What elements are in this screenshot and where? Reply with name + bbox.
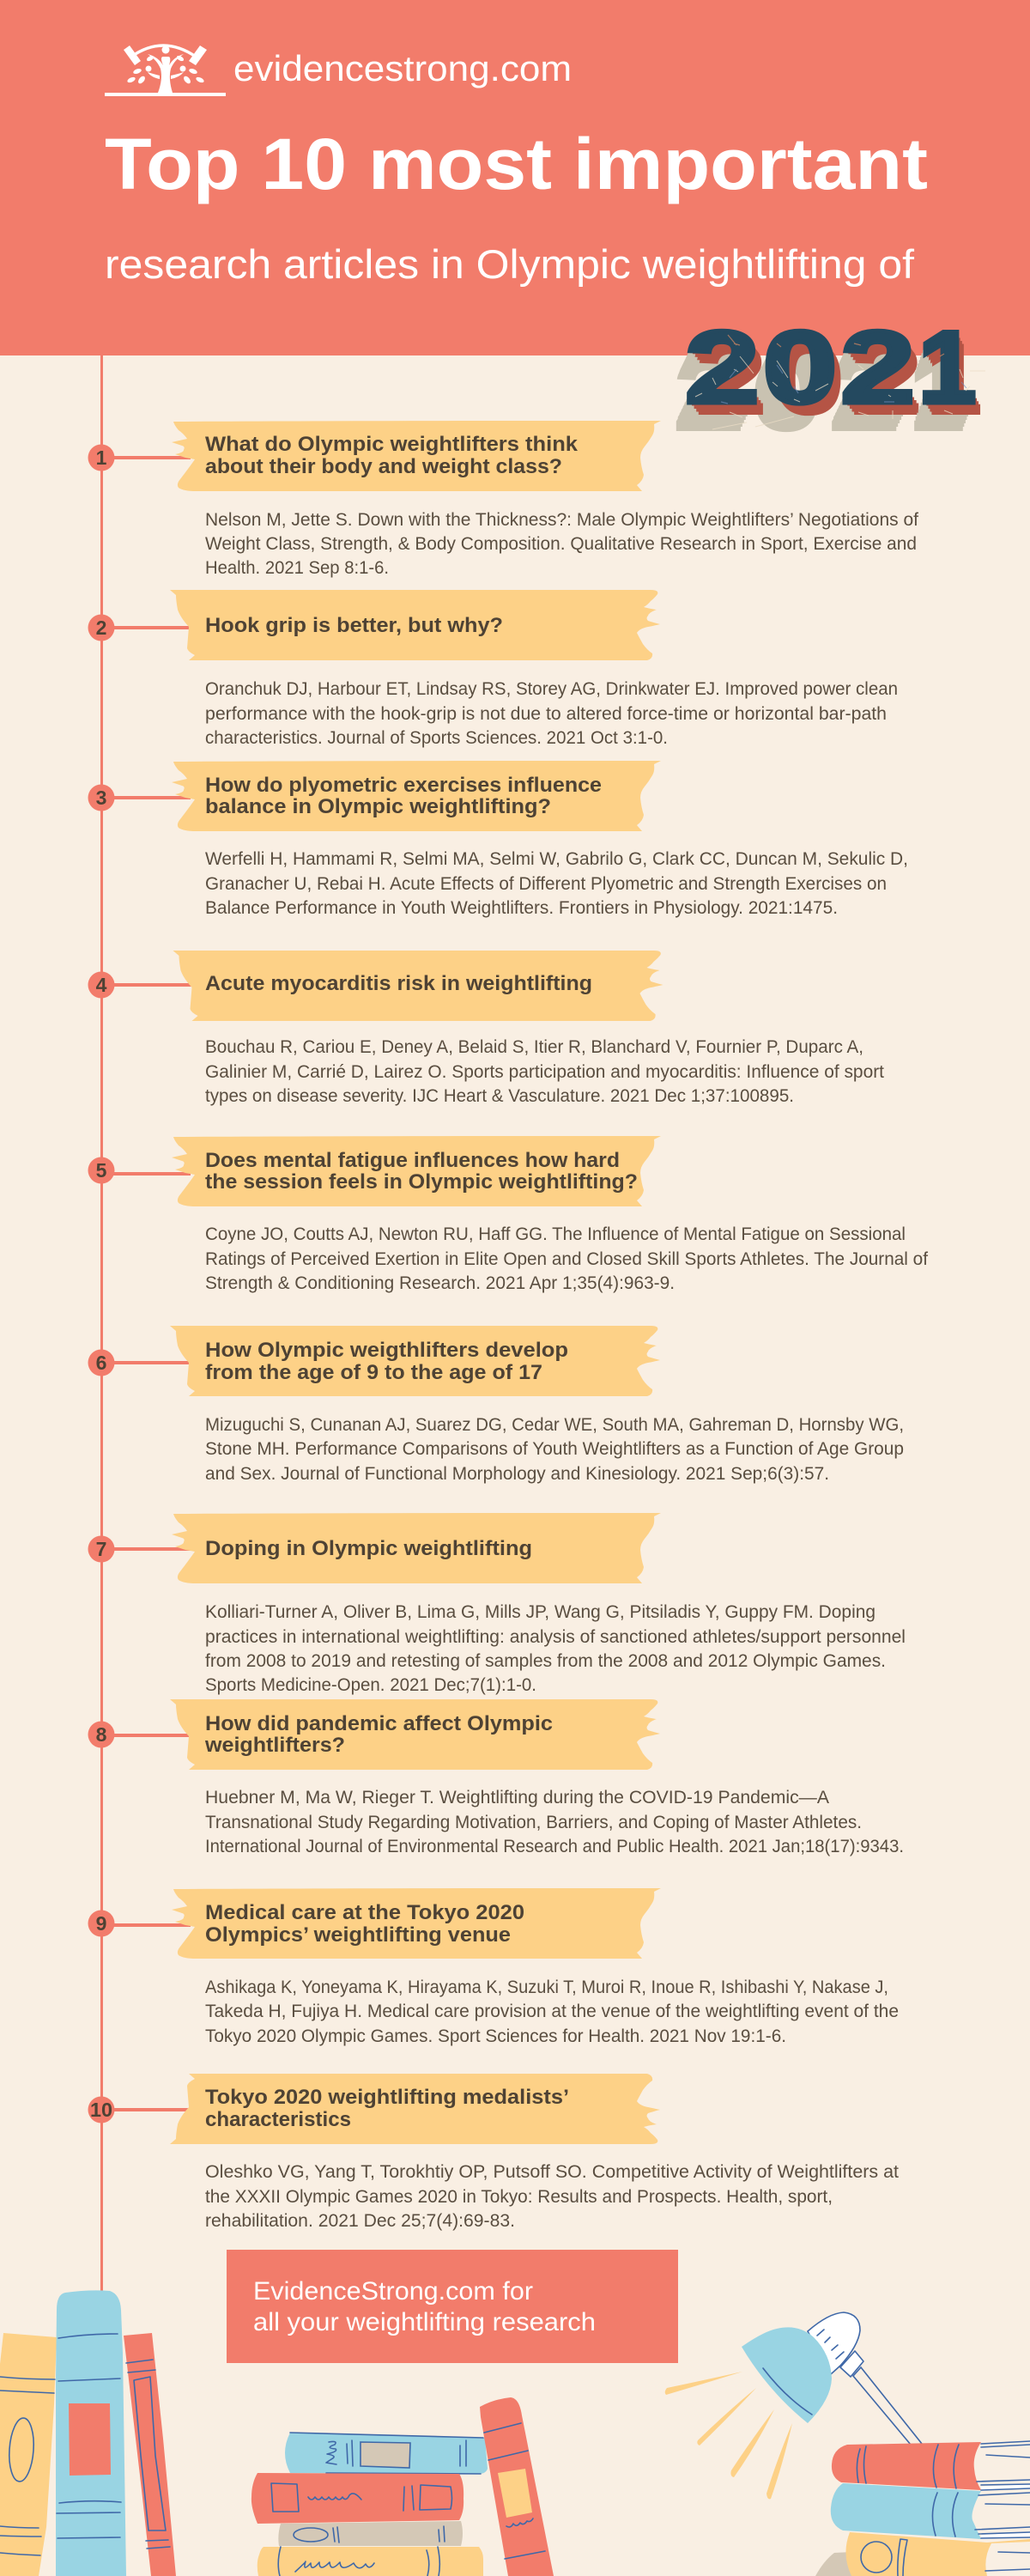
- heading 9: [205, 1901, 524, 1947]
- title: Top 10 most important: [105, 124, 928, 204]
- item 4: [88, 951, 884, 1106]
- icon: leaning book centre right: [480, 2397, 554, 2576]
- number badge 2: 2: [96, 617, 106, 639]
- number badge 1: 1: [96, 447, 107, 469]
- heading 5: the session feels in Olympic weightlifting?: [205, 1170, 638, 1194]
- number badge 2: [88, 615, 115, 641]
- connector 5: [112, 1172, 191, 1176]
- citation 10: Oleshko VG, Yang T, Torokhtiy OP, Putsoff SO. Competitive Activity of Weightlifters at: [205, 2162, 899, 2182]
- number badge 3: [88, 785, 115, 811]
- heading 8: [204, 1712, 553, 1757]
- citation 7: Kolliari-Turner A, Oliver B, Lima G, Mills JP, Wang G, Pitsiladis Y, Guppy FM. Doping: [205, 1602, 876, 1622]
- citation 4: Bouchau R, Cariou E, Deney A, Belaid S, Itier R, Blanchard V, Fournier P, Duparc A,: [205, 1037, 863, 1057]
- blue pile book: [981, 2484, 1030, 2539]
- heading 3: balance in Olympic weightlifting?: [205, 795, 551, 818]
- citation 9: [205, 1978, 899, 2046]
- heading 8: weightlifters?: [204, 1734, 345, 1757]
- citation 9: Ashikaga K, Yoneyama K, Hirayama K, Suzuki T, Muroi R, Inoue R, Ishibashi Y, Nakase J,: [205, 1978, 888, 1997]
- citation 10: [205, 2162, 899, 2231]
- heading 2: Hook grip is better, but why?: [205, 614, 503, 637]
- item 8: [88, 1699, 904, 1856]
- number badge 10: [88, 2097, 115, 2123]
- tape 8: [170, 1699, 660, 1770]
- number badge 8: [88, 1721, 115, 1748]
- connector 10: [112, 2108, 191, 2111]
- citation 8: Transnational Study Regarding Motivation, Barriers, and Coping of Master Athletes.: [205, 1813, 862, 1832]
- citation 6: [205, 1415, 904, 1484]
- heading 10: characteristics: [205, 2108, 351, 2131]
- number badge 6: 6: [96, 1352, 106, 1374]
- tape 9: [172, 1888, 661, 1959]
- heading 6: from the age of 9 to the age of 17: [205, 1361, 542, 1384]
- number badge 10: 10: [90, 2099, 112, 2121]
- citation 3: Werfelli H, Hammami R, Selmi MA, Selmi W, Gabrilo G, Clark CC, Duncan M, Sekulic D,: [205, 849, 908, 869]
- citation 2: characteristics. Journal of Sports Sciences. 2021 Oct 3:1-0.: [205, 728, 668, 748]
- citation 4: types on disease severity. IJC Heart & Vasculature. 2021 Dec 1;37:100895.: [205, 1086, 794, 1106]
- 2021 retro year graphic: 1: [918, 310, 979, 425]
- blue book: [56, 2290, 126, 2576]
- item 3: [88, 761, 908, 918]
- citation 1: Weight Class, Strength, & Body Composition. Qualitative Research in Sport, Exercise and: [205, 534, 917, 554]
- citation 6: Stone MH. Performance Comparisons of Youth Weightlifters as a Function of Age Group: [205, 1439, 904, 1459]
- citation 6: and Sex. Journal of Functional Morphology and Kinesiology. 2021 Sep;6(3):57.: [205, 1464, 829, 1484]
- lamp arm: [853, 2367, 922, 2445]
- item 7: [88, 1513, 906, 1695]
- call to action box: all your weightlifting research: [253, 2308, 596, 2336]
- citation 5: Ratings of Perceived Exertion in Elite Open and Closed Skill Sports Athletes. The Journal of: [205, 1249, 928, 1269]
- item 6: [88, 1326, 904, 1484]
- red stacked book: [251, 2473, 464, 2524]
- number badge 6: [88, 1350, 115, 1376]
- connector 2: [112, 626, 191, 629]
- citation 10: the XXXII Olympic Games 2020 in Tokyo: Results and Prospects. Health, sport,: [205, 2187, 833, 2207]
- connector 7: [112, 1547, 191, 1551]
- icon: desk lamp: [665, 2312, 922, 2499]
- number badge 9: [88, 1910, 115, 1937]
- heading 1: about their body and weight class?: [205, 455, 562, 478]
- heading 10: [205, 2086, 569, 2131]
- citation 7: Sports Medicine-Open. 2021 Dec;7(1):1-0.: [205, 1675, 536, 1695]
- number badge 8: 8: [96, 1723, 107, 1746]
- tape 2: [170, 590, 660, 660]
- heading 3: [205, 774, 602, 818]
- citation 7: practices in international weightlifting: analysis of sanctioned athletes/support personnel: [205, 1627, 906, 1647]
- citation 3: Balance Performance in Youth Weightlifters. Frontiers in Physiology. 2021:1475.: [205, 898, 838, 918]
- heading 1: [205, 433, 579, 478]
- citation 1: Nelson M, Jette S. Down with the Thickness?: Male Olympic Weightlifters’ Negotiations of: [205, 510, 918, 530]
- item 2: [88, 590, 898, 748]
- citation 9: Tokyo 2020 Olympic Games. Sport Sciences for Health. 2021 Nov 19:1-6.: [205, 2026, 786, 2046]
- tape 3: [172, 761, 661, 831]
- citation 1: Health. 2021 Sep 8:1-6.: [205, 558, 389, 578]
- citation 7: [205, 1602, 906, 1695]
- lamp neck: [840, 2351, 863, 2377]
- citation 2: Oranchuk DJ, Harbour ET, Lindsay RS, Storey AG, Drinkwater EJ. Improved power clean: [205, 679, 898, 699]
- citation 6: Mizuguchi S, Cunanan AJ, Suarez DG, Cedar WE, South MA, Gahreman D, Hornsby WG,: [205, 1415, 904, 1435]
- yellow pile book: [845, 2532, 1030, 2576]
- red pile book: [832, 2442, 981, 2490]
- logo: tree and barbell: [105, 46, 226, 96]
- citation 4: Galinier M, Carrié D, Lairez O. Sports participation and myocarditis: Influence of sport: [205, 1062, 884, 1082]
- heading 1: What do Olympic weightlifters think: [205, 433, 579, 456]
- call to action box: [227, 2250, 678, 2363]
- citation 3: Granacher U, Rebai H. Acute Effects of Different Plyometric and Strength Exercises on: [205, 874, 887, 894]
- citation 2: [205, 679, 898, 748]
- tan corner book: [815, 2552, 853, 2576]
- icon: stacked books centre: [251, 2433, 488, 2576]
- tape 5: [172, 1136, 661, 1206]
- yellow stacked book: [258, 2547, 483, 2576]
- citation 2: performance with the hook-grip is not due to altered force-time or horizontal bar-path: [205, 704, 887, 724]
- logo wordmark: evidencestrong.com: [233, 48, 572, 88]
- citation 8: International Journal of Environmental Research and Public Health. 2021 Jan;18(17):9343.: [205, 1837, 904, 1856]
- citation 10: rehabilitation. 2021 Dec 25;7(4):69-83.: [205, 2211, 515, 2231]
- heading 9: Olympics’ weightlifting venue: [205, 1923, 511, 1947]
- heading 8: How did pandemic affect Olympic: [205, 1712, 553, 1735]
- number badge 7: [88, 1535, 115, 1563]
- connector 3: [112, 796, 191, 799]
- call to action box: EvidenceStrong.com for: [253, 2277, 533, 2306]
- number badge 9: 9: [96, 1912, 106, 1935]
- tape 6: [170, 1326, 660, 1396]
- heading 6: How Olympic weigthlifters develop: [205, 1339, 568, 1362]
- item 1: [88, 421, 918, 578]
- timeline vertical line: [100, 355, 103, 2293]
- connector 9: [112, 1923, 191, 1927]
- lamp rays: [665, 2372, 792, 2499]
- 2021 retro year graphic: 202: [685, 310, 918, 425]
- heading 10: Tokyo 2020 weightlifting medalists’: [205, 2086, 569, 2109]
- yellow book: [0, 2333, 57, 2576]
- icon: upright books left: [0, 2290, 176, 2576]
- citation 3: [205, 849, 908, 918]
- citation 5: [205, 1224, 928, 1293]
- icon: book pile right: [815, 2441, 1030, 2576]
- citation 5: Coyne JO, Coutts AJ, Newton RU, Haff GG. The Influence of Mental Fatigue on Sessional: [205, 1224, 906, 1244]
- number badge 3: 3: [96, 787, 106, 809]
- item 5: [88, 1136, 928, 1293]
- number badge 4: 4: [96, 974, 107, 996]
- heading 9: Medical care at the Tokyo 2020: [205, 1901, 524, 1924]
- tape 10: [170, 2074, 660, 2144]
- lamp back: [808, 2312, 860, 2374]
- heading 5: [205, 1149, 638, 1194]
- heading 4: Acute myocarditis risk in weightlifting: [205, 972, 592, 995]
- number badge 1: [88, 445, 115, 471]
- heading 3: How do plyometric exercises influence: [205, 774, 602, 797]
- number badge 7: 7: [96, 1538, 106, 1560]
- blue stacked book: [285, 2433, 488, 2474]
- item 10: [88, 2074, 899, 2231]
- connector 8: [112, 1734, 191, 1737]
- citation 8: Huebner M, Ma W, Rieger T. Weightlifting during the COVID-19 Pandemic—A: [205, 1788, 829, 1807]
- subtitle: research articles in Olympic weightlifting of: [105, 241, 915, 287]
- number badge 5: [88, 1157, 115, 1183]
- connector 4: [112, 983, 194, 987]
- connector 6: [112, 1361, 191, 1364]
- heading 7: Doping in Olympic weightlifting: [205, 1537, 532, 1560]
- tan stacked book: [278, 2521, 463, 2546]
- lamp shade: [742, 2327, 832, 2423]
- item 9: [88, 1888, 899, 2046]
- number badge 4: [88, 972, 115, 998]
- number badge 5: 5: [96, 1159, 107, 1182]
- header band: [0, 0, 1030, 355]
- citation 7: from 2008 to 2019 and retesting of samples from the 2008 and 2012 Olympic Games.: [205, 1651, 886, 1671]
- heading 6: [205, 1339, 568, 1384]
- citation 8: [205, 1788, 904, 1856]
- citation 4: [205, 1037, 884, 1106]
- citation 1: [205, 510, 918, 578]
- red leaning book: [124, 2333, 176, 2576]
- tape 4: [173, 951, 663, 1021]
- citation 5: Strength & Conditioning Research. 2021 Apr 1;35(4):963-9.: [205, 1273, 675, 1293]
- tape 7: [172, 1513, 661, 1583]
- tape 1: [172, 421, 661, 491]
- heading 5: Does mental fatigue influences how hard: [205, 1149, 620, 1172]
- connector 1: [112, 456, 191, 459]
- citation 9: Takeda H, Fujiya H. Medical care provision at the venue of the weightlifting event of the: [205, 2002, 899, 2021]
